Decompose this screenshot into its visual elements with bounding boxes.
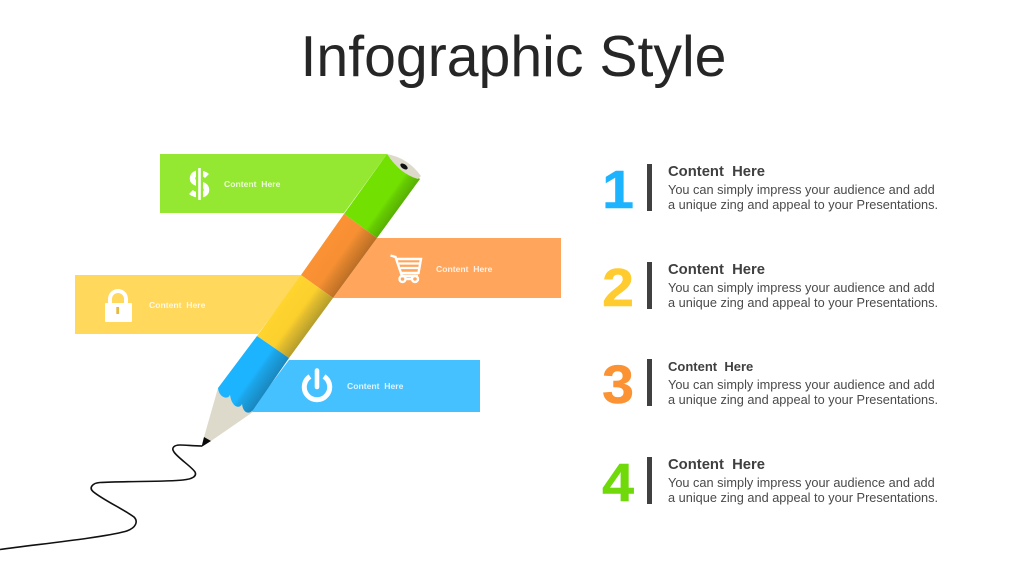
pencil segment: yellow xyxy=(257,275,333,358)
item 4 xyxy=(602,452,938,512)
divider 4 xyxy=(647,456,652,504)
divider 2 xyxy=(647,262,652,308)
number 4: 4 xyxy=(602,452,634,512)
description 3: You can simply impress your audience and add xyxy=(668,377,935,392)
number 2: 2 xyxy=(602,258,634,318)
heading 3: Content Here xyxy=(668,359,753,374)
label: blue ribbon: Content Here xyxy=(347,381,404,391)
pencil graphite xyxy=(202,437,211,447)
ribbon: green xyxy=(160,154,387,213)
pencil tip wood xyxy=(203,388,253,443)
label: green ribbon: Content Here xyxy=(224,179,281,189)
heading 2: Content Here xyxy=(668,262,765,278)
pencil line scribble xyxy=(0,445,202,550)
description 4: a unique zing and appeal to your Presentations. xyxy=(668,490,938,505)
pencil xyxy=(202,154,421,447)
number 1: 1 xyxy=(602,160,634,220)
icon: power xyxy=(304,370,330,400)
ribbon: yellow xyxy=(75,275,302,334)
icon: dollar xyxy=(191,168,207,200)
ribbon: orange xyxy=(333,238,561,298)
description 2: a unique zing and appeal to your Presentations. xyxy=(668,295,938,310)
ribbon: blue xyxy=(250,360,480,412)
pencil segment: green xyxy=(344,154,420,238)
description 3 xyxy=(668,377,938,407)
pencil segment: blue xyxy=(218,336,289,413)
heading 1: Content Here xyxy=(668,164,765,180)
number 3: 3 xyxy=(602,355,634,415)
pencil end cap xyxy=(387,154,421,179)
label: orange ribbon: Content Here xyxy=(436,264,493,274)
description 2 xyxy=(668,280,938,310)
description 1: You can simply impress your audience and add xyxy=(668,182,935,197)
description 4: You can simply impress your audience and add xyxy=(668,474,935,490)
pencil segment: orange xyxy=(301,214,377,298)
description 4 xyxy=(668,474,938,505)
divider 1 xyxy=(647,164,652,211)
item 1 xyxy=(602,160,938,220)
icon: shopping cart xyxy=(390,256,421,282)
icon: padlock xyxy=(105,291,132,322)
description 2: You can simply impress your audience and add xyxy=(668,280,935,294)
divider 3 xyxy=(647,359,652,406)
description 1 xyxy=(668,182,938,212)
pencil end core xyxy=(399,162,409,171)
heading 4: Content Here xyxy=(668,456,765,472)
item 3 xyxy=(602,355,938,415)
title: Infographic Style xyxy=(300,25,726,89)
description 3: a unique zing and appeal to your Presentations. xyxy=(668,392,938,407)
description 1: a unique zing and appeal to your Presentations. xyxy=(668,197,938,212)
label: yellow ribbon: Content Here xyxy=(149,300,206,310)
item 2 xyxy=(602,258,938,318)
